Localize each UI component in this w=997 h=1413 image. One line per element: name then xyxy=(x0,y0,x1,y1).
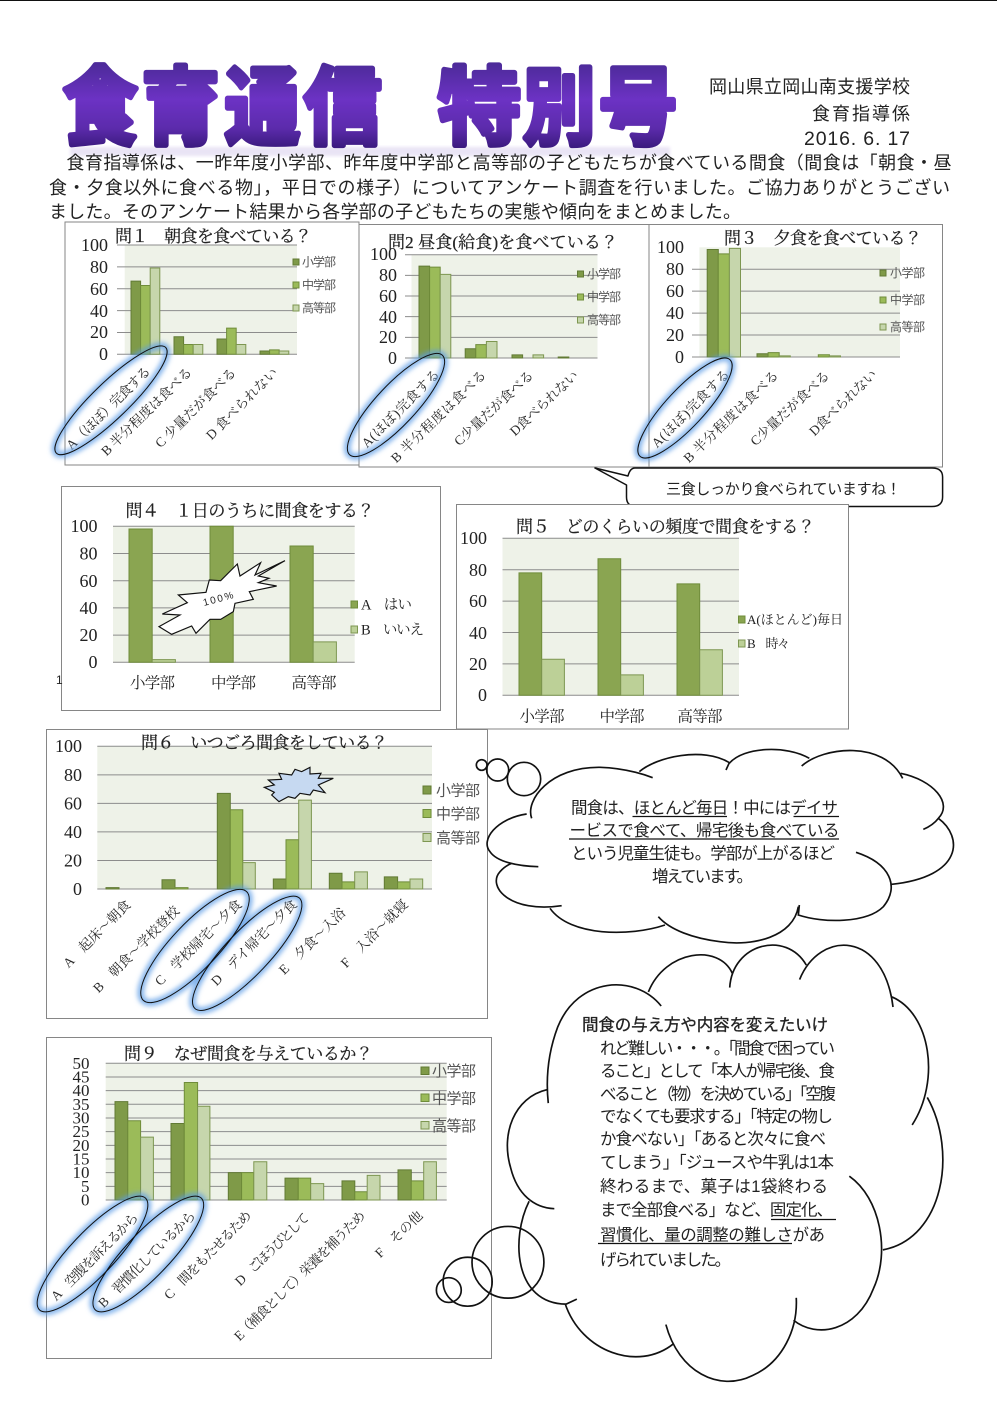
burst: blue xyxy=(264,767,333,802)
burst: 100%: 100% xyxy=(202,590,235,609)
category labels: C 少量だが食べる xyxy=(151,364,239,451)
y axis labels xyxy=(370,244,397,368)
chart: question 4 bars xyxy=(113,526,355,662)
y axis labels: 40 xyxy=(64,822,82,842)
cloud text: べること（物）を決めている」「空腹 xyxy=(600,1084,836,1104)
y axis labels: 20 xyxy=(80,625,98,645)
category labels: B 習慣化しているから xyxy=(94,1207,199,1311)
legend: 小学部 xyxy=(890,265,925,280)
chart: question 5 bars xyxy=(502,538,739,695)
cloud text: ること」として「本人が帰宅後、食 xyxy=(600,1062,835,1080)
legend xyxy=(738,612,843,651)
legend xyxy=(421,1063,476,1135)
panel: question 4 chart xyxy=(56,486,440,710)
category labels: D 食べられない xyxy=(203,365,281,443)
cloud text: という児童生徒も。学部が上がるほど xyxy=(571,844,836,863)
legend: 高等部 xyxy=(302,301,336,315)
chart: question 2 bars xyxy=(405,255,598,358)
y axis labels: 10 xyxy=(72,1163,90,1182)
legend: 中学部 xyxy=(436,806,480,823)
highlight ovals: questions 1 to 3 xyxy=(44,335,744,469)
intro text: ました。そのアンケート結果から各学部の子どもたちの実態や傾向をまとめました。 xyxy=(49,202,741,222)
chart title: 問５ どのくらいの頻度で間食をする？ xyxy=(516,518,815,536)
category labels: D食べられない xyxy=(806,367,880,439)
y axis labels: 20 xyxy=(379,327,397,347)
cloud text: 習慣化、量の調整の難しさがあ xyxy=(600,1226,825,1244)
cloud text: げられていました。 xyxy=(600,1250,731,1270)
y axis labels: 60 xyxy=(379,286,397,306)
category labels: A （ほぼ）完食する xyxy=(62,363,153,453)
y axis labels: 0 xyxy=(88,652,98,672)
y axis labels xyxy=(70,516,98,672)
y axis labels: 80 xyxy=(379,265,397,285)
category labels: A(ほぼ)完食する xyxy=(358,366,443,451)
x axis labels: 小学部 xyxy=(520,708,565,726)
category labels xyxy=(62,363,281,459)
legend: 中学部 xyxy=(302,277,336,292)
highlight ovals xyxy=(24,1183,217,1325)
chart: question 9 bars xyxy=(106,1063,447,1200)
callout: three meals: 三食しっかり食べられていますね！ xyxy=(666,481,901,498)
y axis labels: 20 xyxy=(90,322,108,342)
legend: 高等部 xyxy=(432,1117,476,1135)
category labels: B 半分程度は食べる xyxy=(97,364,195,459)
y axis labels: 40 xyxy=(469,623,487,643)
cloud text: 間食は、ほとんど毎日！中にはデイサ xyxy=(571,798,838,818)
legend: A(ほとんど)毎日 xyxy=(747,612,843,627)
y axis labels: 60 xyxy=(80,571,98,591)
panel: question 6 chart xyxy=(46,730,488,1024)
legend: A はい xyxy=(361,598,412,614)
y axis labels xyxy=(657,237,684,367)
chart title: 問３ 夕食を食べている？ xyxy=(724,229,922,248)
y axis labels: 20 xyxy=(64,850,82,870)
y axis labels: 60 xyxy=(90,279,108,299)
highlight ovals xyxy=(127,876,315,1024)
y axis labels: 80 xyxy=(64,765,82,785)
chart title: 問2 昼食(給食)を食べている？ xyxy=(388,233,618,252)
y axis labels: 60 xyxy=(666,281,684,301)
y axis labels xyxy=(72,1054,90,1210)
y axis labels: 0 xyxy=(73,879,82,899)
y axis labels: 25 xyxy=(72,1122,90,1141)
title: word art: 号 xyxy=(599,41,677,162)
title: word art: 食 xyxy=(63,39,138,162)
category labels: D デイ帰宅～夕食 xyxy=(207,896,300,989)
burst: 100% xyxy=(159,561,285,634)
y axis labels: 100 xyxy=(70,516,98,536)
y axis labels: 40 xyxy=(80,598,98,618)
cloud text: ービスで食べて、帰宅後も食べている xyxy=(570,821,840,840)
category labels: A(ほぼ)完食する xyxy=(648,366,733,451)
chart: question 6 bars xyxy=(97,746,432,889)
chart: question 1 bars xyxy=(117,245,297,354)
category labels: A 起床～朝食 xyxy=(59,896,134,971)
category labels: F 入浴～就寝 xyxy=(337,896,411,971)
legend: B 時々 xyxy=(747,636,790,651)
y axis labels: 5 xyxy=(81,1177,90,1196)
title: word art: 通 xyxy=(225,39,300,162)
y axis labels: 80 xyxy=(469,560,487,580)
category labels: C少量だが食べる xyxy=(450,367,536,449)
school name and date xyxy=(709,77,910,150)
cloud text: てしまう」「ジュースや牛乳は1本 xyxy=(600,1153,834,1172)
category labels: B 半分程度は食べる xyxy=(387,367,489,466)
y axis labels: 0 xyxy=(478,685,487,705)
title: word art: 育 xyxy=(142,41,219,163)
category labels xyxy=(648,366,880,466)
category labels xyxy=(358,366,581,466)
category labels: A 空腹を訴えるから xyxy=(47,1209,141,1304)
y axis labels xyxy=(81,235,108,364)
y axis labels: 45 xyxy=(72,1068,90,1086)
y axis labels: 20 xyxy=(469,654,487,674)
x axis labels: 高等部 xyxy=(678,706,723,726)
category labels xyxy=(59,896,411,996)
y axis labels: 15 xyxy=(72,1150,90,1168)
title: word art: 信 xyxy=(304,41,381,163)
category labels: B 朝食～学校登校 xyxy=(89,902,183,996)
y axis labels xyxy=(460,528,487,705)
y axis labels: 100 xyxy=(370,244,397,264)
legend: 中学部 xyxy=(432,1090,476,1108)
y axis labels: 80 xyxy=(90,257,108,277)
chart: question 3 bars xyxy=(692,247,900,357)
y axis labels: 40 xyxy=(666,303,684,323)
y axis labels: 30 xyxy=(72,1108,90,1128)
chart title: 問１ 朝食を食べている？ xyxy=(115,227,312,246)
category labels: C 間をもたせるため xyxy=(161,1208,254,1302)
intro text: 食育指導係は、一昨年度小学部、昨年度中学部と高等部の子どもたちが食べている間食（間食は「朝食・昼 xyxy=(66,153,952,173)
thought cloud: snack frequency xyxy=(476,749,953,943)
school name and date: 2016. 6. 17 xyxy=(804,128,910,150)
legend: 中学部 xyxy=(890,292,925,307)
legend: 高等部 xyxy=(436,829,480,847)
y axis labels: 50 xyxy=(72,1054,90,1073)
legend xyxy=(351,598,424,638)
cloud text: 終わるまで、菓子は1袋終わる xyxy=(600,1177,828,1196)
y axis labels: 0 xyxy=(388,348,397,368)
x axis labels: 中学部 xyxy=(211,674,256,692)
legend: 高等部 xyxy=(890,320,925,334)
panel: question 2 chart xyxy=(358,224,649,467)
school name and date: 食育指導係 xyxy=(812,104,910,124)
y axis labels: 40 xyxy=(90,301,108,321)
category labels: D ごほうびとして xyxy=(232,1210,312,1289)
title: word art xyxy=(63,39,677,163)
y axis labels: 20 xyxy=(666,325,684,345)
y axis labels: 100 xyxy=(81,235,108,255)
x axis labels xyxy=(520,706,723,726)
y axis labels: 80 xyxy=(666,259,684,279)
x axis labels xyxy=(130,673,337,692)
y axis labels: 40 xyxy=(72,1081,90,1100)
chart title: 問６ いつごろ間食をしている？ xyxy=(141,734,388,752)
legend: 小学部 xyxy=(436,782,480,800)
title: word art: 別 xyxy=(523,40,595,162)
school name and date: 岡山県立岡山南支援学校 xyxy=(709,77,910,97)
legend: 中学部 xyxy=(587,289,621,304)
category labels: E（補食として）栄養を補うため xyxy=(230,1207,368,1344)
x axis labels: 小学部 xyxy=(130,674,175,692)
cloud text: れど難しい・・・。「間食で困ってい xyxy=(600,1039,835,1058)
y axis labels: 0 xyxy=(81,1190,90,1210)
title: word art: 特 xyxy=(438,40,521,163)
cloud text: 間食の与え方や内容を変えたいけ xyxy=(582,1016,828,1034)
panel: question 3 chart xyxy=(648,224,942,467)
intro text: 食・夕食以外に食べる物」，平日での様子）についてアンケート調査を行いました。ご協力ありがとうござい xyxy=(49,177,950,198)
y axis labels: 100 xyxy=(55,736,82,756)
category labels: E 夕食～入浴 xyxy=(276,905,349,977)
legend xyxy=(578,266,621,327)
legend xyxy=(293,254,336,315)
cloud text xyxy=(569,798,840,886)
chart title: 問４ １日のうちに間食をする？ xyxy=(126,502,374,520)
stray digit: 1 xyxy=(56,673,63,687)
category labels: B 半分程度は食べる xyxy=(680,367,781,466)
legend: 小学部 xyxy=(302,254,336,269)
category labels: C 学校帰宅～夕食 xyxy=(151,896,245,989)
cloud text: でなくても要求する」「特定の物し xyxy=(600,1107,833,1126)
cloud text: 増えています。 xyxy=(652,867,753,886)
category labels xyxy=(47,1207,426,1344)
y axis labels: 100 xyxy=(460,528,487,548)
legend xyxy=(423,782,480,847)
category labels: F その他 xyxy=(372,1208,426,1261)
cloud text xyxy=(582,1016,836,1270)
category labels: C少量だが食べる xyxy=(747,367,832,449)
legend: 小学部 xyxy=(587,266,621,281)
title reflection xyxy=(70,147,670,156)
chart title: 問９ なぜ間食を与えているか？ xyxy=(124,1044,373,1064)
legend xyxy=(880,265,925,334)
category labels: D食べられない xyxy=(507,368,581,439)
x axis labels: 中学部 xyxy=(600,708,645,726)
y axis labels: 80 xyxy=(80,544,98,564)
y axis labels: 40 xyxy=(379,307,397,327)
y axis labels: 35 xyxy=(72,1095,90,1114)
y axis labels: 0 xyxy=(99,344,108,364)
callout: three meals xyxy=(595,468,943,506)
y axis labels: 60 xyxy=(64,794,82,814)
legend: B いいえ xyxy=(361,622,424,638)
cloud text: か食べない」「あると次々に食べ xyxy=(600,1130,826,1148)
cloud text: まで全部食べる」など、固定化、 xyxy=(600,1200,833,1220)
panel: question 9 chart xyxy=(24,1038,492,1358)
legend: 小学部 xyxy=(432,1063,476,1080)
x axis labels: 高等部 xyxy=(292,673,337,692)
y axis labels xyxy=(55,736,82,899)
panel: question 1 chart xyxy=(62,222,359,465)
y axis labels: 60 xyxy=(469,591,487,611)
panel: question 5 chart xyxy=(456,504,848,729)
thought cloud: difficulties xyxy=(436,945,943,1381)
intro text xyxy=(49,153,952,222)
y axis labels: 100 xyxy=(657,237,684,257)
y axis labels: 0 xyxy=(675,347,684,367)
legend: 高等部 xyxy=(587,313,621,327)
y axis labels: 20 xyxy=(72,1136,90,1155)
